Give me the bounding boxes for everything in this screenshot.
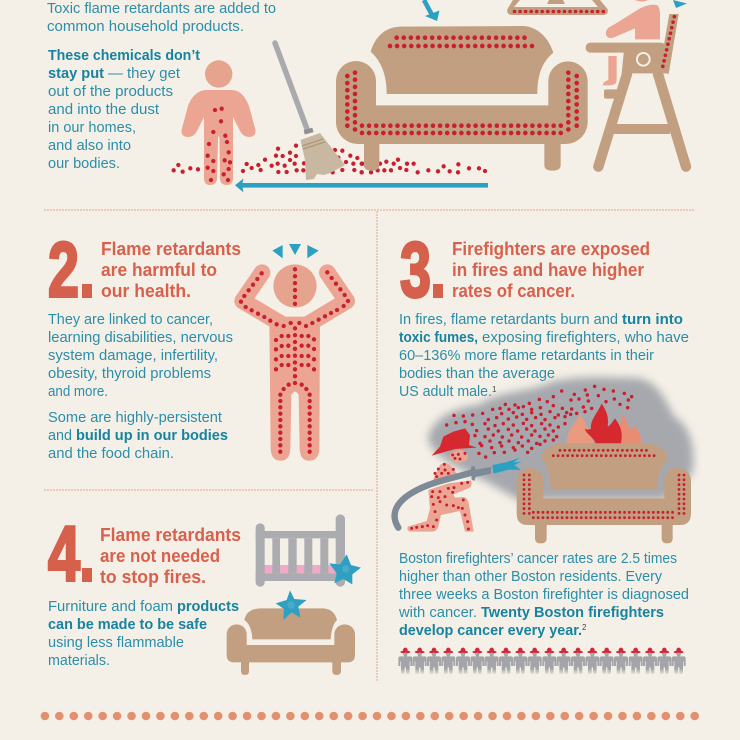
hose and nozzle [395, 458, 522, 528]
text block: safe products: materials. [48, 653, 110, 669]
text block: Boston firefighters [398, 551, 689, 639]
arrow: chemicals falling at top right [673, 0, 687, 8]
text block: Boston firefighters: three weeks a Boston firefighter is diagnosed [399, 587, 689, 603]
heading: firefighters exposed: in fires and have higher [452, 260, 644, 280]
icon: sofa with star [227, 590, 355, 675]
heading: harmful to health: our health. [101, 281, 191, 301]
text block: toxic fumes: exposing firefighters, who have [482, 330, 689, 346]
text block: Boston firefighters: higher than other Boston residents. Every [399, 569, 663, 585]
icon: person with headache and dots [241, 244, 348, 461]
panel: section 1 text: These chemicals don’t [48, 48, 200, 64]
panel: section 1 text: — they get [108, 66, 180, 82]
heading: firefighters exposed: Firefighters are exposed [452, 239, 650, 259]
text block: toxic fumes [399, 312, 689, 400]
floor dust dots [174, 146, 485, 172]
icon: baby in high chair [586, 0, 686, 167]
number 2: 2 [48, 226, 79, 314]
text block: safe products: using less flammable [48, 635, 184, 651]
smoke dots [447, 386, 632, 457]
text block: health effects: and the food chain. [48, 446, 174, 462]
text block: health effects [48, 312, 233, 462]
text block: toxic fumes: In fires, flame retardants burn and [399, 312, 618, 328]
text block: health effects: Some are highly-persistent [48, 410, 222, 426]
text block: safe products: can be made to be safe [48, 617, 207, 633]
text block: safe products: Furniture and foam [48, 599, 173, 615]
text block: health effects: They are linked to cancer, [48, 312, 213, 328]
panel: section 1 text: Toxic flame retardants are added to [47, 1, 276, 17]
text block: toxic fumes: 1 [492, 385, 497, 394]
heading: firefighters exposed: rates of cancer. [452, 281, 575, 301]
heading: not needed: to stop fires. [100, 567, 206, 587]
heading: harmful to health: are harmful to [101, 260, 217, 280]
firefighter [407, 428, 477, 532]
panel: section 1 text [47, 1, 276, 172]
number 3: 3 [400, 226, 431, 314]
text block: health effects: build up in our bodies [76, 428, 228, 444]
panel: section 1 text: out of the products [48, 84, 173, 100]
illustration: firefighter spraying burning sofa [395, 377, 693, 543]
heading: firefighters exposed [452, 239, 650, 301]
panel: section 1 text: and into the dust [48, 102, 159, 118]
text block: safe products: products [177, 599, 239, 615]
heading: harmful to health: Flame retardants [101, 239, 241, 259]
divider lines [45, 210, 695, 682]
icon: crib with star [256, 514, 361, 587]
text block: health effects: learning disabilities, nervous [48, 330, 233, 346]
flames [567, 403, 641, 443]
panel: section 2 [48, 226, 348, 462]
number 4: 4 [48, 510, 80, 598]
panel: section 1 text: in our homes, [48, 120, 136, 136]
text block: safe products [48, 599, 239, 669]
text block: health effects: and more. [48, 384, 108, 400]
panel: section 1 text: common household products. [47, 19, 244, 35]
text block: toxic fumes: toxic fumes, [399, 330, 478, 346]
text block: toxic fumes: bodies than the average [399, 366, 555, 382]
text block: Boston firefighters: develop cancer every year. [399, 623, 582, 639]
panel: section 3 [395, 226, 693, 674]
text block: Boston firefighters: 2 [582, 623, 587, 632]
smoke cloud [428, 377, 693, 500]
panel: section 1 text: and also into [48, 138, 131, 154]
text block: toxic fumes: turn into [622, 312, 683, 328]
text block: toxic fumes: 60–136% more flame retardants in their [399, 348, 654, 364]
dotted footer divider [45, 712, 698, 720]
text block: Boston firefighters: with cancer. [398, 605, 477, 621]
heading: not needed [100, 525, 241, 587]
burning sofa [517, 443, 691, 543]
text block: Boston firefighters: Boston firefighters’ cancer rates are 2.5 times [399, 551, 677, 567]
heading: harmful to health [101, 239, 241, 301]
panel: section 1 text: stay put [48, 66, 104, 82]
text block: toxic fumes: US adult male. [399, 384, 492, 400]
heading: not needed: are not needed [100, 546, 220, 566]
icon: person with few chemical dots [181, 60, 256, 185]
text block: Boston firefighters: Twenty Boston firefighters [481, 605, 664, 621]
text block: health effects: and [48, 428, 72, 444]
heading: not needed: Flame retardants [100, 525, 241, 545]
panel: section 1 text: our bodies. [48, 156, 120, 172]
panel: section 4 [48, 510, 361, 675]
icon: broom [275, 43, 345, 180]
text block: health effects: obesity, thyroid problems [48, 366, 211, 382]
arrow: dust moving left [235, 178, 488, 192]
text block: health effects: system damage, infertility, [48, 348, 218, 364]
icon: sofa with flame retardants [336, 26, 588, 171]
arrow: chemicals falling onto sofa [424, 0, 440, 21]
icon: table fragment at top [507, 0, 608, 15]
icon row: twenty firefighters [398, 648, 686, 674]
